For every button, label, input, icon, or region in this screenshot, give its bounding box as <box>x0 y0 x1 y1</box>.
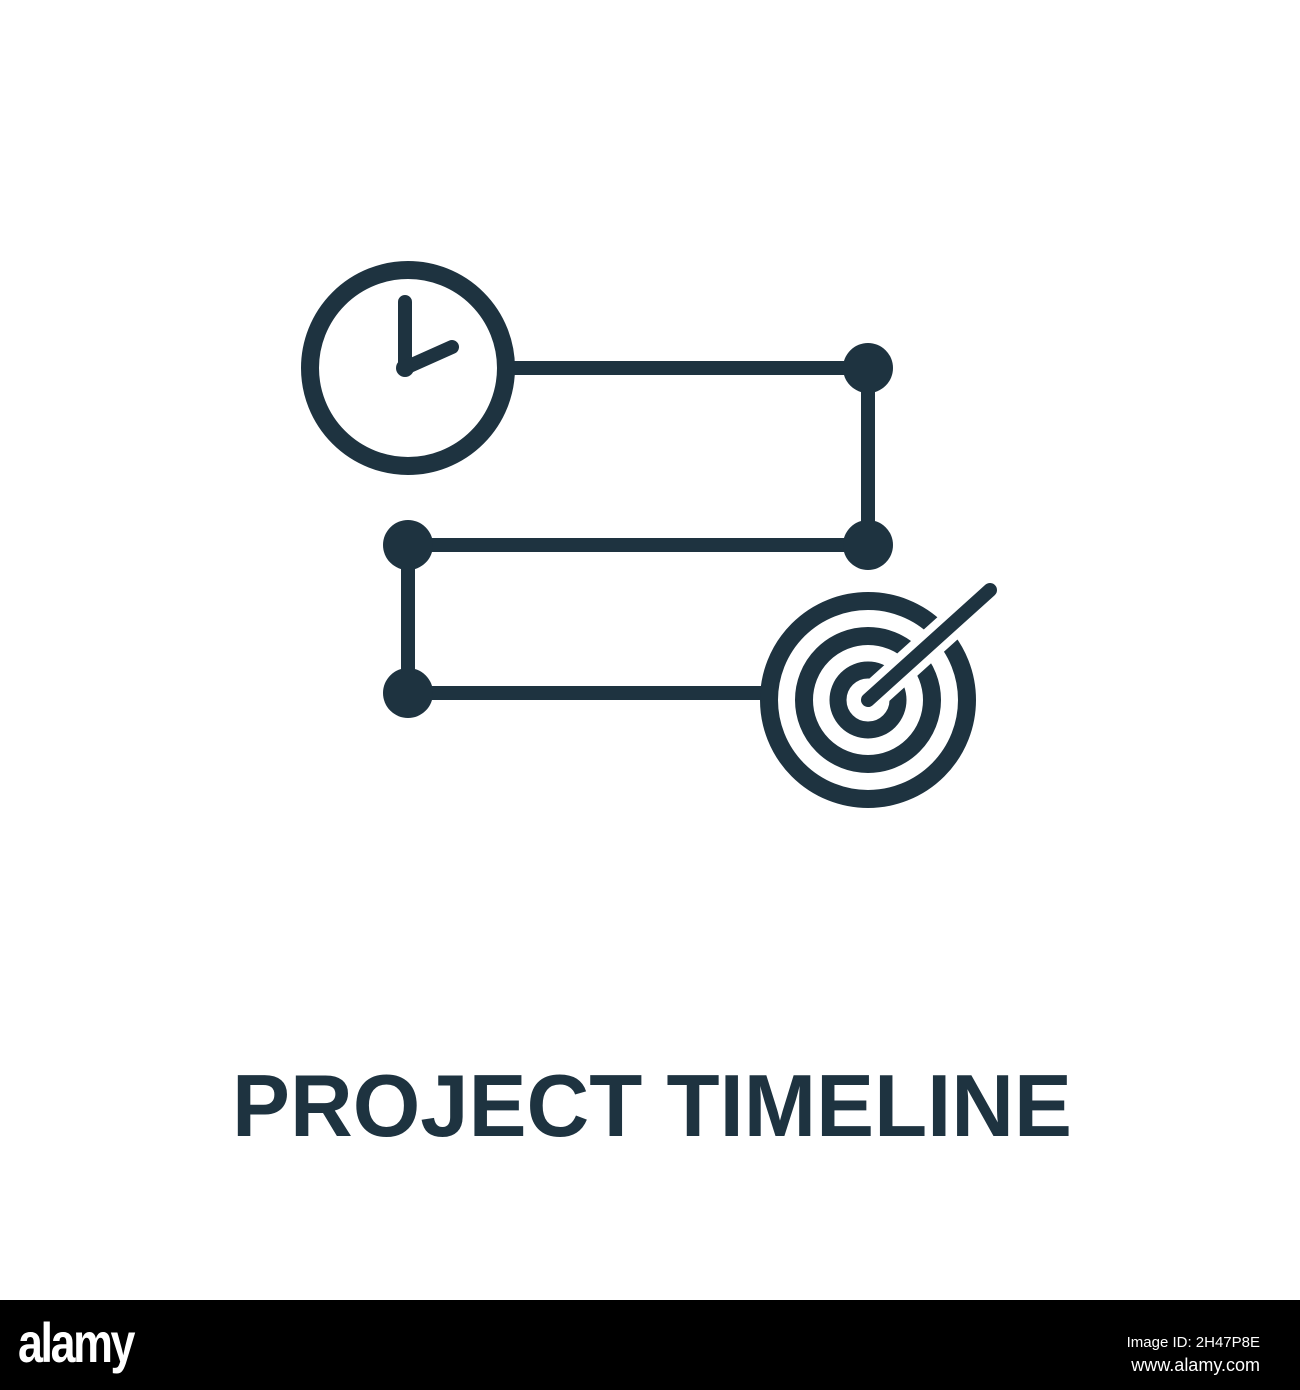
footer image id <box>1127 1334 1260 1375</box>
icon: connector lines <box>408 368 868 693</box>
footer bar <box>0 1300 1300 1390</box>
icon: target <box>769 590 990 799</box>
footer logo: alamy <box>18 1311 133 1374</box>
icon: node dots <box>383 343 893 718</box>
footer image id: www.alamy.com <box>1131 1355 1260 1375</box>
icon: project timeline <box>301 261 997 808</box>
footer image id: Image ID: 2H47P8E <box>1127 1334 1260 1351</box>
title: PROJECT TIMELINE <box>232 1056 1072 1155</box>
icon: clock <box>310 270 506 466</box>
